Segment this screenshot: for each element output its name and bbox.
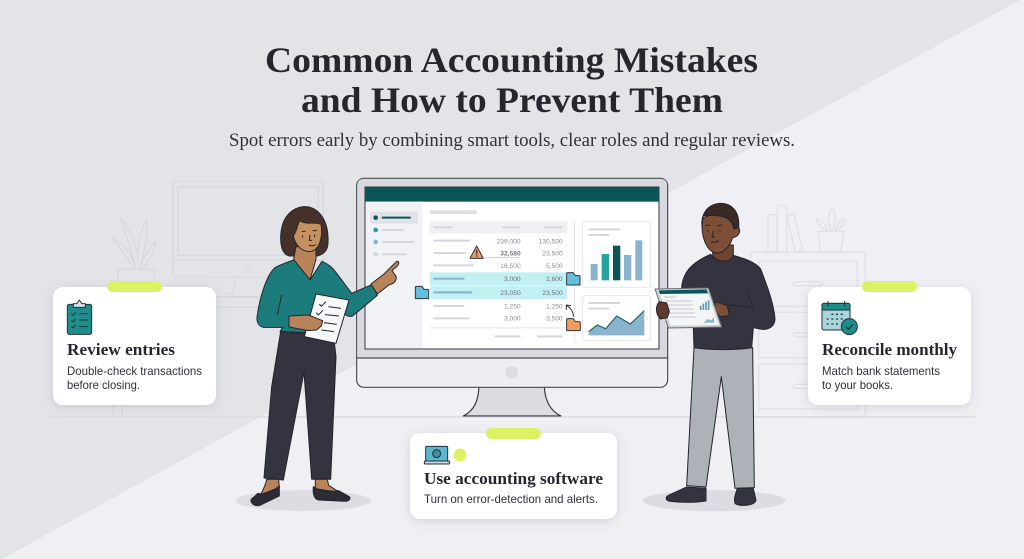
description: Match bank statements [822, 364, 940, 378]
card: use accounting software [410, 428, 617, 519]
accounting table: 32,580 [500, 251, 521, 258]
icon: blue folder right [567, 273, 580, 285]
accounting table: 3,000 [504, 276, 521, 283]
shoes [666, 487, 756, 505]
accounting table: 239,000 [497, 238, 521, 245]
monitor [357, 178, 668, 416]
tablet [655, 288, 722, 328]
accounting table: 23,500 [542, 290, 563, 297]
checklist paper [304, 294, 349, 343]
accounting table: 3,500 [546, 316, 563, 323]
accounting table: 5,500 [546, 263, 563, 270]
hand on tablet [715, 302, 729, 317]
head [702, 215, 740, 253]
title: and How to Prevent Them [301, 80, 723, 120]
accounting table: 23,500 [542, 251, 563, 258]
hair [702, 203, 739, 229]
bar chart [583, 222, 651, 287]
screen [365, 187, 659, 349]
description: Double-check transactions [67, 364, 202, 378]
facial features [302, 231, 317, 246]
accounting table: 23,050 [500, 290, 521, 297]
heading: Use accounting software [424, 469, 603, 488]
accounting table: 130,500 [539, 238, 563, 245]
person: woman [236, 207, 399, 511]
hand holding tablet [656, 302, 669, 319]
description: before closing. [67, 378, 140, 392]
floor shadow [643, 490, 785, 511]
pill tab [862, 281, 917, 292]
icon: blue folder left [415, 286, 429, 299]
subtitle: Spot errors early by combining smart tools, clear roles and regular reviews. [229, 131, 795, 151]
facial features [705, 225, 723, 242]
accounting table: 1,250 [546, 303, 563, 310]
sidebar navigation [370, 212, 418, 257]
person: man [643, 203, 785, 511]
accounting table [430, 221, 567, 337]
floor line [50, 416, 975, 418]
monitor stand [463, 387, 561, 416]
shoes [251, 486, 350, 506]
background sketch: monitor, plant and desk on the left [112, 181, 323, 417]
icon: clipboard checklist [67, 300, 92, 334]
title [265, 40, 758, 120]
face [293, 221, 322, 252]
pointing hand [371, 261, 399, 294]
description [67, 364, 202, 392]
card: review entries [53, 281, 216, 405]
area chart [583, 296, 651, 341]
accounting table: 16,500 [500, 263, 521, 270]
dark sweater [682, 254, 775, 350]
heading: Review entries [67, 340, 176, 359]
neck [713, 245, 733, 262]
hair fringe [289, 211, 322, 234]
floor shadow [236, 490, 371, 511]
background sketch: bookshelf cabinet on the right [751, 206, 865, 417]
lime dot [454, 448, 466, 462]
grey trousers [687, 348, 754, 488]
black pants [264, 331, 336, 480]
description [822, 364, 940, 392]
icon: calendar with check [822, 301, 857, 335]
icon: laptop [424, 446, 450, 464]
icon: orange folder [567, 319, 580, 331]
pill tab [486, 428, 541, 439]
icon: warning triangle [470, 246, 483, 258]
card: reconcile monthly [808, 281, 971, 405]
pill tab [107, 281, 162, 292]
neck [293, 247, 316, 280]
accounting table: 1,250 [504, 303, 521, 310]
monitor body [357, 178, 668, 387]
description: to your books. [822, 378, 893, 392]
teal sweater [257, 260, 377, 333]
holding hand [289, 315, 323, 331]
arrow [566, 305, 574, 316]
description: Turn on error-detection and alerts. [424, 492, 598, 506]
ankles [261, 479, 340, 495]
title: Common Accounting Mistakes [265, 40, 758, 80]
heading: Reconcile monthly [822, 340, 958, 359]
accounting table: 3,000 [504, 316, 521, 323]
accounting table: 2,600 [546, 276, 563, 283]
hair back [281, 207, 328, 256]
